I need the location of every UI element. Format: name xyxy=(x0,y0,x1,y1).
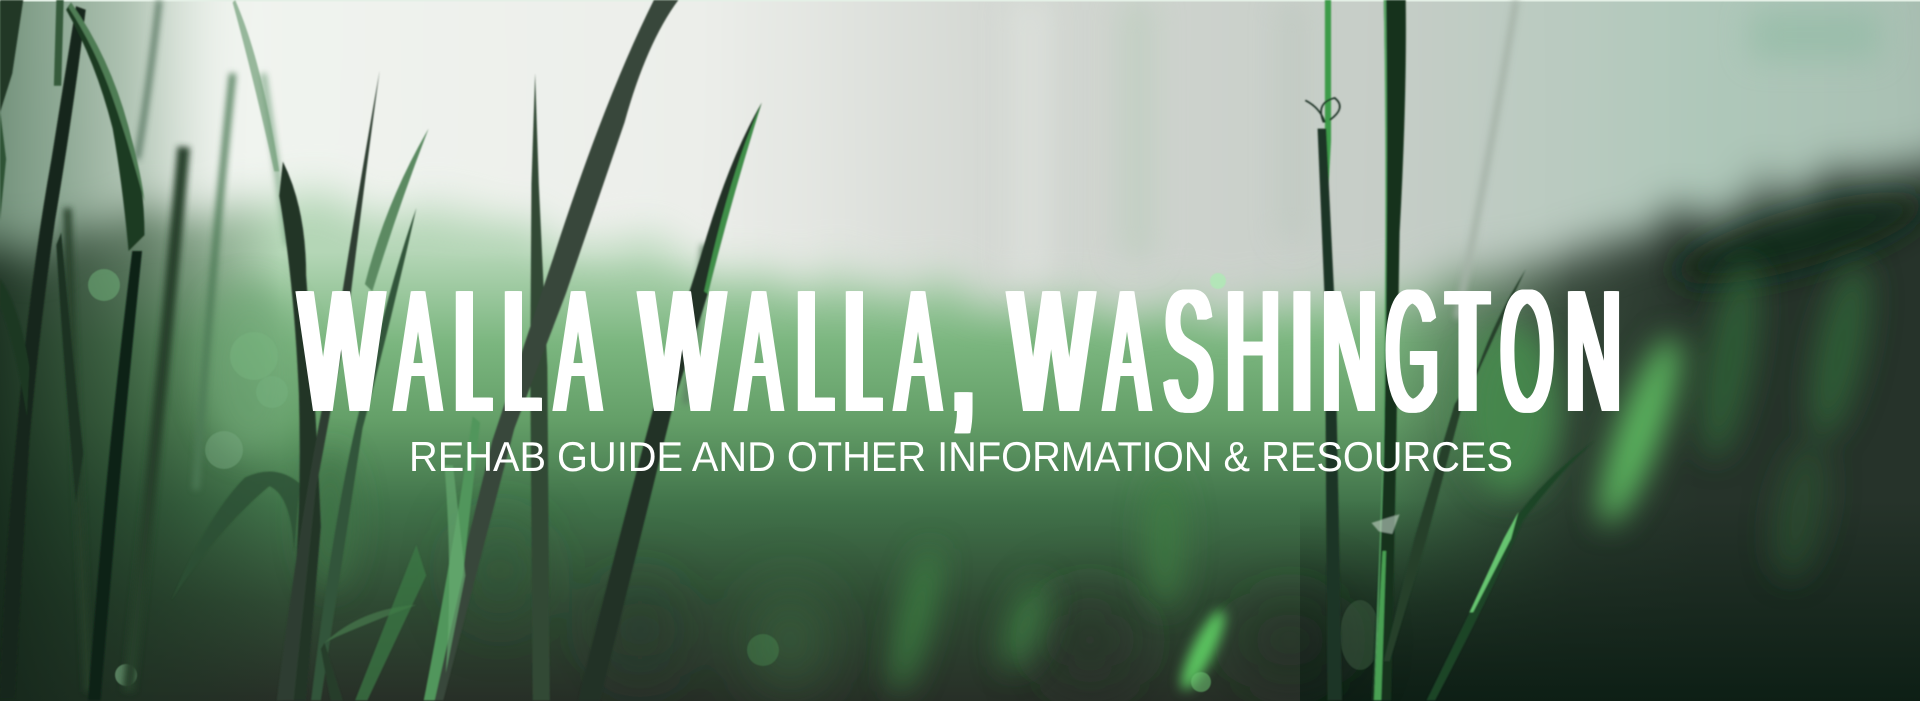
centre-left blades xyxy=(233,0,279,171)
soft streaks in the sky xyxy=(1010,0,1880,280)
title: A xyxy=(1105,253,1149,448)
title: N xyxy=(1566,253,1621,448)
far-left blades xyxy=(0,0,23,113)
title xyxy=(295,253,1621,448)
title: , xyxy=(955,253,971,448)
top edge line xyxy=(0,0,1920,2)
title: L xyxy=(506,253,538,448)
title: A xyxy=(737,253,781,448)
title: T xyxy=(1449,253,1486,448)
title: I xyxy=(1294,253,1309,448)
title: A xyxy=(896,253,940,448)
green streaks xyxy=(200,257,1882,696)
tendril xyxy=(1305,98,1340,122)
right-centre blades xyxy=(1325,0,1331,208)
title: L xyxy=(847,253,879,448)
title: A xyxy=(396,253,440,448)
title: A xyxy=(556,253,600,448)
title: N xyxy=(1322,253,1377,448)
bokeh dots xyxy=(88,269,1380,692)
title: S xyxy=(1164,253,1213,448)
title: O xyxy=(1501,253,1554,448)
title: W xyxy=(641,253,723,448)
subtitle: REHAB GUIDE AND OTHER INFORMATION & RESOURCES xyxy=(409,433,1513,480)
title: W xyxy=(300,253,382,448)
out-of-focus grass blades xyxy=(67,0,1516,692)
title: L xyxy=(457,253,489,448)
title: W xyxy=(1010,253,1092,448)
mottled lower band xyxy=(464,520,1350,690)
title: L xyxy=(799,253,831,448)
title: G xyxy=(1386,253,1439,448)
title: H xyxy=(1226,253,1280,448)
sky xyxy=(0,0,1920,312)
